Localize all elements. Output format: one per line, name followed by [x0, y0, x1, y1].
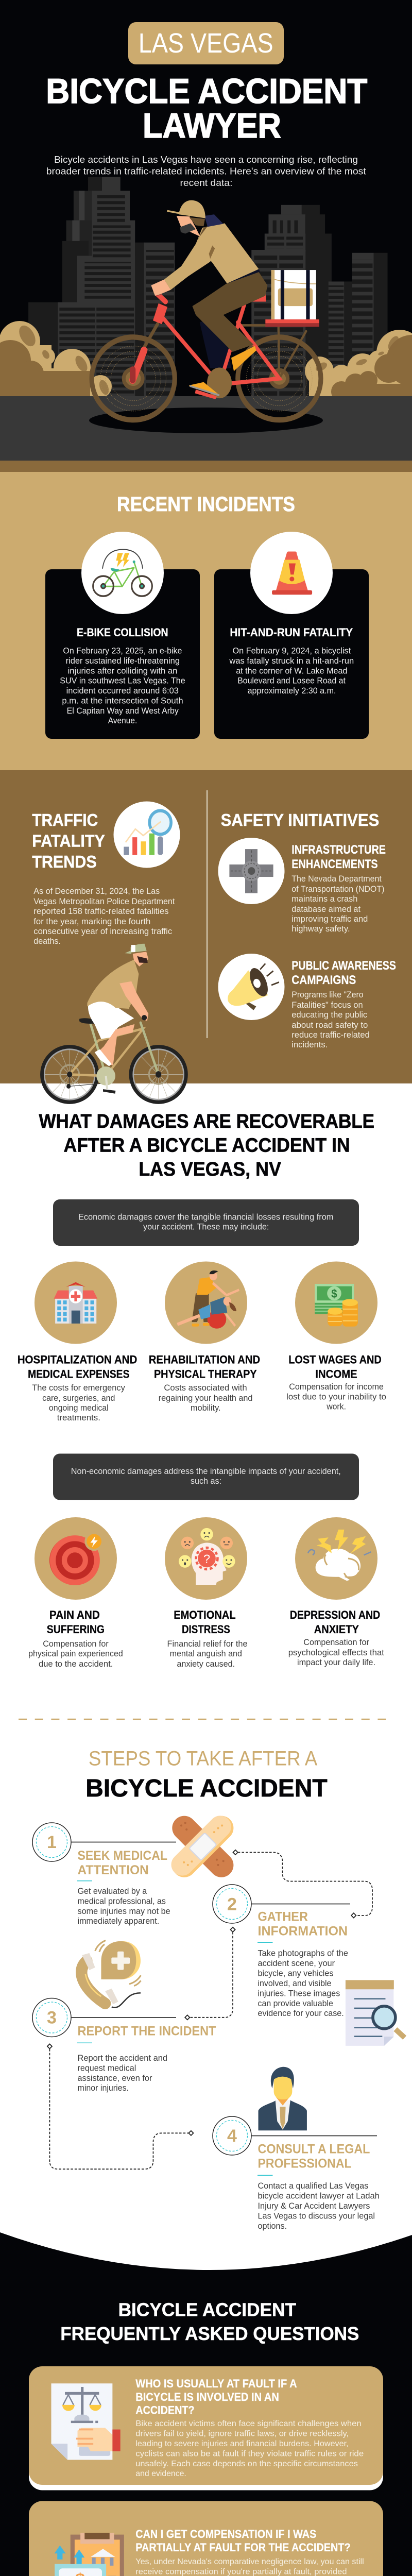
step 3: report the incident: 3 [47, 2008, 57, 2028]
item: depression and anxiety: psychological effects that [288, 1648, 384, 1657]
icon: megaphone [218, 954, 284, 1020]
item: hospitalization: The costs for emergency [32, 1383, 125, 1393]
step 1: seek medical attention [32, 1823, 176, 1926]
step 3: report the incident: Report the accident and [77, 2053, 167, 2063]
heading: traffic fatality trends: TRAFFIC [32, 810, 98, 829]
step 2: gather information: 2 [227, 1895, 237, 1914]
illustration: delivery cyclist [92, 200, 321, 420]
card: hit-and-run fatality: Boulevard and Losee Road at [237, 676, 346, 685]
frame [70, 1023, 159, 1086]
icon: chart and magnifier [113, 802, 180, 868]
callout: non-economic damages [53, 1454, 359, 1500]
icon: money and coins [315, 1284, 358, 1327]
FAQ card 2: PARTIALLY AT FAULT FOR THE ACCIDENT? [135, 2541, 351, 2554]
icon: head with moods [179, 1528, 235, 1585]
card: hit-and-run fatality: approximately 2:30 a.m. [248, 686, 336, 696]
step 4: consult a legal professional [213, 2116, 380, 2231]
main title: LAWYER [143, 106, 281, 145]
title and text: E-BIKE COLLISION [77, 626, 168, 639]
card: e-bike collision: injuries after colliding with an [68, 666, 177, 676]
torso [87, 960, 139, 1009]
item: lost wages [286, 1261, 386, 1412]
heading: FAQ [60, 2299, 359, 2344]
FAQ card 1: ACCIDENT? [135, 2404, 195, 2416]
step 1: seek medical attention: some injuries may not be [77, 1906, 170, 1916]
rear leg [200, 313, 231, 368]
item: pain and suffering: Compensation for [43, 1639, 109, 1649]
text: trends: Vegas Metropolitan Police Department [33, 896, 175, 906]
step 1: seek medical attention: Get evaluated by a [77, 1886, 147, 1896]
item: depression and anxiety: Compensation for [303, 1637, 369, 1647]
text: public awareness campaigns: CAMPAIGNS [291, 973, 356, 987]
panel: trends and safety [0, 770, 412, 1083]
hero background [0, 0, 412, 461]
dashed route connectors [47, 1850, 372, 2169]
item: hospitalization: treatments. [57, 1413, 100, 1422]
FAQ card 2 [29, 2501, 383, 2576]
city skyline [28, 177, 388, 398]
text: trends: consecutive year of increasing traffic [33, 926, 173, 936]
item: lost wages: work. [326, 1401, 346, 1412]
FAQ card 1: leading to severe injuries and financial burdens. However, [135, 2439, 349, 2448]
FAQ card 1: cyclists can also be at fault if they violate traffic rules or ride [135, 2449, 364, 2459]
illustration: bearded cyclist [42, 944, 186, 1102]
icon: brain with bolts [308, 1530, 371, 1581]
main title [46, 72, 367, 145]
leg [99, 1024, 134, 1065]
icon: roundabout [218, 838, 284, 904]
text: infrastructure enhancements: improving traffic and [291, 914, 368, 924]
text: trends: deaths. [33, 936, 61, 946]
step 4: consult a legal professional: Injury & Car Accident Lawyers [258, 2201, 370, 2211]
item: lost wages: LOST WAGES AND [288, 1353, 382, 1366]
step 2: gather information [213, 1885, 350, 2018]
callout: economic damages [53, 1199, 359, 1246]
item: hospitalization: MEDICAL EXPENSES [28, 1367, 129, 1381]
card: hit-and-run fatality: at the corner of W. Lake Mead [236, 666, 347, 676]
step 3: report the incident [32, 1998, 216, 2093]
heading: what damages are recoverable: AFTER A BICYCLE ACCIDENT IN [64, 1134, 350, 1156]
head [133, 952, 148, 967]
text: public awareness campaigns: educating the public [291, 1010, 368, 1020]
heading: traffic fatality trends: FATALITY [32, 832, 105, 850]
item: hospitalization: ongoing medical [49, 1403, 109, 1413]
step 1: seek medical attention: SEEK MEDICAL [77, 1849, 167, 1863]
badge: Las Vegas [128, 22, 284, 64]
step 3: report the incident: request medical [77, 2063, 136, 2073]
card: hit-and-run fatality: On February 9, 2024, a bicyclist [233, 646, 351, 655]
heading: traffic fatality trends [32, 810, 105, 871]
card: e-bike collision: incident occurred around 6:03 [66, 686, 179, 696]
icon: head with moods: ? [203, 1552, 210, 1566]
text: trends: reported 158 traffic-related fatalities [33, 906, 169, 916]
step 2: gather information: involved, and visible [258, 1978, 331, 1988]
item: lost wages: Compensation for income [289, 1382, 384, 1392]
step 2: gather information: can provide valuable [258, 1998, 333, 2008]
step 4: consult a legal professional: CONSULT A LEGAL [258, 2142, 370, 2157]
icon: bandage [167, 1811, 238, 1882]
heading: recent incidents: RECENT INCIDENTS [117, 493, 295, 516]
text: infrastructure enhancements: ENHANCEMENTS [291, 857, 378, 871]
item: rehabilitation [149, 1261, 260, 1413]
intro text [46, 154, 366, 188]
text: public awareness campaigns: reduce traffic-related [291, 1030, 370, 1040]
text: trends: for the year, marking the fourth [33, 917, 150, 926]
icon: e-bike [93, 549, 152, 596]
item: depression and anxiety: DEPRESSION AND [290, 1608, 380, 1621]
item: rehabilitation: regaining your health and [159, 1393, 252, 1403]
step 2: gather information: evidence for your case. [258, 2008, 344, 2018]
heading: safety initiatives: SAFETY INITIATIVES [221, 810, 379, 829]
card: e-bike collision: p.m. at the intersection of South [62, 696, 183, 706]
intro text: recent data: [180, 177, 233, 188]
item: pain and suffering: physical pain experienced [28, 1649, 123, 1658]
intro text: broader trends in traffic-related incidents. Here's an overview of the most [46, 166, 366, 176]
intro text: Bicycle accidents in Las Vegas have seen a concerning rise, reflecting [54, 154, 358, 165]
step 2: gather information: INFORMATION [258, 1924, 348, 1938]
item: rehabilitation: PHYSICAL THERAPY [154, 1367, 257, 1381]
text: public awareness campaigns: Programs like "Zero [291, 990, 364, 999]
item: rehabilitation: Costs associated with [164, 1383, 247, 1393]
card: e-bike collision [45, 532, 200, 739]
dust clouds [0, 321, 412, 402]
step 3: report the incident: minor injuries. [77, 2083, 129, 2093]
item: depression and anxiety [288, 1517, 384, 1667]
callout: economic damages: your accident. These may include: [143, 1222, 269, 1231]
step 1: seek medical attention: ATTENTION [77, 1863, 149, 1877]
item: emotional distress: EMOTIONAL [174, 1608, 236, 1621]
FAQ card 2: receive compensation if you're partially at fault, provided [135, 2568, 347, 2576]
item: pain and suffering: due to the accident. [39, 1659, 113, 1669]
road shadow [89, 408, 323, 433]
FAQ card 1: BICYCLE IS INVOLVED IN AN [135, 2391, 279, 2403]
text: trends [33, 886, 175, 946]
title and text: HIT-AND-RUN FATALITY [230, 626, 353, 639]
step 2: gather information: bicycle, any vehicles [258, 1968, 333, 1978]
item: rehabilitation: REHABILITATION AND [149, 1353, 260, 1366]
callout: non-economic damages: Non-economic damages address the intangible impacts of your accident, [71, 1466, 341, 1476]
text: public awareness campaigns: Fatalities" focus on [291, 1000, 363, 1010]
step 4: consult a legal professional: options. [258, 2221, 287, 2231]
heading: steps to take [85, 1748, 328, 1802]
step 1: seek medical attention: 1 [47, 1833, 57, 1852]
step 1: seek medical attention: medical professional, as [77, 1896, 166, 1906]
text: infrastructure enhancements: of Transportation (NDOT) [291, 884, 384, 894]
heading: what damages are recoverable: LAS VEGAS, NV [139, 1159, 282, 1180]
icon: lawyer [259, 2067, 307, 2130]
shorts [88, 997, 134, 1039]
text: public awareness campaigns: incidents. [291, 1040, 328, 1049]
band: brown strip [0, 461, 412, 472]
step 2: gather information: Take photographs of the [258, 1948, 348, 1958]
item: pain and suffering: SUFFERING [47, 1623, 105, 1636]
badge: Las Vegas: LAS VEGAS [139, 28, 273, 59]
step 3: report the incident: REPORT THE INCIDENT [77, 2024, 216, 2038]
card: e-bike collision: SUV in southwest Las Vegas. The [60, 676, 185, 685]
shoes and pedals [231, 346, 256, 371]
saddle [79, 1018, 101, 1024]
item: depression and anxiety: ANXIETY [314, 1623, 359, 1636]
FAQ card 1: Bike accident victims often face significant challenges when [135, 2419, 362, 2428]
delivery box and rack [265, 270, 319, 327]
icon: scales of justice document [51, 2383, 121, 2460]
heading: FAQ: FREQUENTLY ASKED QUESTIONS [60, 2323, 359, 2344]
step 4: consult a legal professional: bicycle accident lawyer at Ladah [258, 2191, 380, 2201]
card: e-bike collision: Avenue. [108, 716, 137, 725]
FAQ card 2: Yes, under Nevada's comparative negligence law, you can still [135, 2557, 364, 2566]
text: trends: As of December 31, 2024, the Las [33, 886, 160, 896]
step 2: gather information: injuries. These images [258, 1989, 340, 1998]
icon: target [49, 1532, 104, 1585]
item: pain and suffering [28, 1517, 123, 1669]
text: infrastructure enhancements: INFRASTRUCTURE [291, 843, 386, 857]
heading: steps to take: BICYCLE ACCIDENT [85, 1775, 328, 1802]
trousers [192, 272, 267, 352]
step 4: consult a legal professional: PROFESSIONAL [258, 2157, 352, 2171]
wheels [42, 1047, 186, 1102]
card: e-bike collision: rider sustained life-threatening [66, 656, 180, 666]
item: rehabilitation: mobility. [191, 1403, 221, 1413]
icon: phone and medical pin [81, 1940, 141, 2007]
text: infrastructure enhancements: database aimed at [291, 904, 360, 914]
FAQ card 2: CAN I GET COMPENSATION IF I WAS [135, 2528, 316, 2540]
step 4: consult a legal professional: 4 [227, 2126, 237, 2146]
item: lost wages: lost due to your inability to [286, 1392, 386, 1401]
card: e-bike collision: El Capitan Way and West Arby [67, 706, 179, 716]
panel: FAQ background [0, 2232, 412, 2576]
item: emotional distress: DISTRESS [182, 1623, 230, 1636]
item: emotional distress: Financial relief for the [167, 1639, 248, 1649]
icon: hospital [54, 1282, 97, 1324]
FAQ card 1: WHO IS USUALLY AT FAULT IF A [135, 2377, 297, 2390]
rider head [167, 200, 224, 236]
callout: economic damages: Economic damages cover the tangible financial losses resulting from [78, 1212, 333, 1222]
item: hospitalization: care, surgeries, and [42, 1393, 115, 1403]
text: infrastructure enhancements: highway safety. [291, 924, 350, 934]
heading: traffic fatality trends: TRENDS [32, 852, 97, 871]
heading: steps to take: STEPS TO TAKE AFTER A [89, 1748, 318, 1770]
main title: BICYCLE ACCIDENT [46, 72, 367, 111]
FAQ card 1: and evidence. [135, 2469, 186, 2478]
FAQ card 1: unsafely. Each case depends on the specific circumstances [135, 2460, 358, 2468]
item: emotional distress: anxiety caused. [177, 1659, 235, 1669]
card: hit-and-run fatality [214, 532, 369, 739]
bicycle wheels [92, 337, 321, 420]
item: emotional distress [165, 1517, 248, 1669]
icon: clipboard and bill [55, 2533, 124, 2576]
item: pain and suffering: PAIN AND [49, 1608, 100, 1621]
item: emotional distress: mental anguish and [170, 1649, 242, 1658]
icon: warning cone [272, 551, 312, 595]
text: infrastructure enhancements: The Nevada Department [291, 874, 382, 884]
road [0, 396, 412, 461]
text: infrastructure enhancements [291, 843, 386, 934]
heading: what damages are recoverable [39, 1111, 374, 1180]
step 3: report the incident: assistance, even for [77, 2073, 152, 2083]
FAQ card 1 [29, 2366, 383, 2490]
step 2: gather information: GATHER [258, 1909, 308, 1924]
step 2: gather information: accident scene, your [258, 1958, 335, 1968]
icon: money and coins: $ [331, 1287, 337, 1300]
callout: non-economic damages: such as: [191, 1476, 221, 1486]
FAQ card 1: drivers fail to yield, ignore traffic laws, or drive recklessly, [135, 2430, 349, 2438]
icon: physical therapy [177, 1270, 239, 1329]
item: depression and anxiety: impact your daily life. [297, 1657, 375, 1667]
bike frame [133, 294, 306, 384]
card: hit-and-run fatality: was fatally struck in a hit-and-run [229, 656, 354, 666]
item: hospitalization: HOSPITALIZATION AND [18, 1353, 137, 1366]
item: hospitalization [18, 1261, 137, 1422]
icon: document and magnifier [346, 1980, 405, 2046]
handlebar [153, 287, 162, 295]
text: public awareness campaigns: about road safety to [291, 1020, 368, 1030]
step 1: seek medical attention: immediately apparent. [77, 1916, 159, 1926]
panel: recent incidents [0, 472, 412, 770]
text: infrastructure enhancements: maintains a crash [291, 894, 357, 904]
text: public awareness campaigns [291, 959, 396, 1049]
step 4: consult a legal professional: Las Vegas to discuss your legal [258, 2211, 375, 2221]
heading: what damages are recoverable: WHAT DAMAGES ARE RECOVERABLE [39, 1111, 374, 1132]
arm [119, 981, 148, 1021]
item: lost wages: INCOME [315, 1367, 357, 1381]
card: e-bike collision: On February 23, 2025, an e-bike [63, 646, 182, 655]
step 4: consult a legal professional: Contact a qualified Las Vegas [258, 2181, 368, 2191]
jacket and arm [151, 223, 260, 296]
heading: FAQ: BICYCLE ACCIDENT [118, 2299, 296, 2320]
